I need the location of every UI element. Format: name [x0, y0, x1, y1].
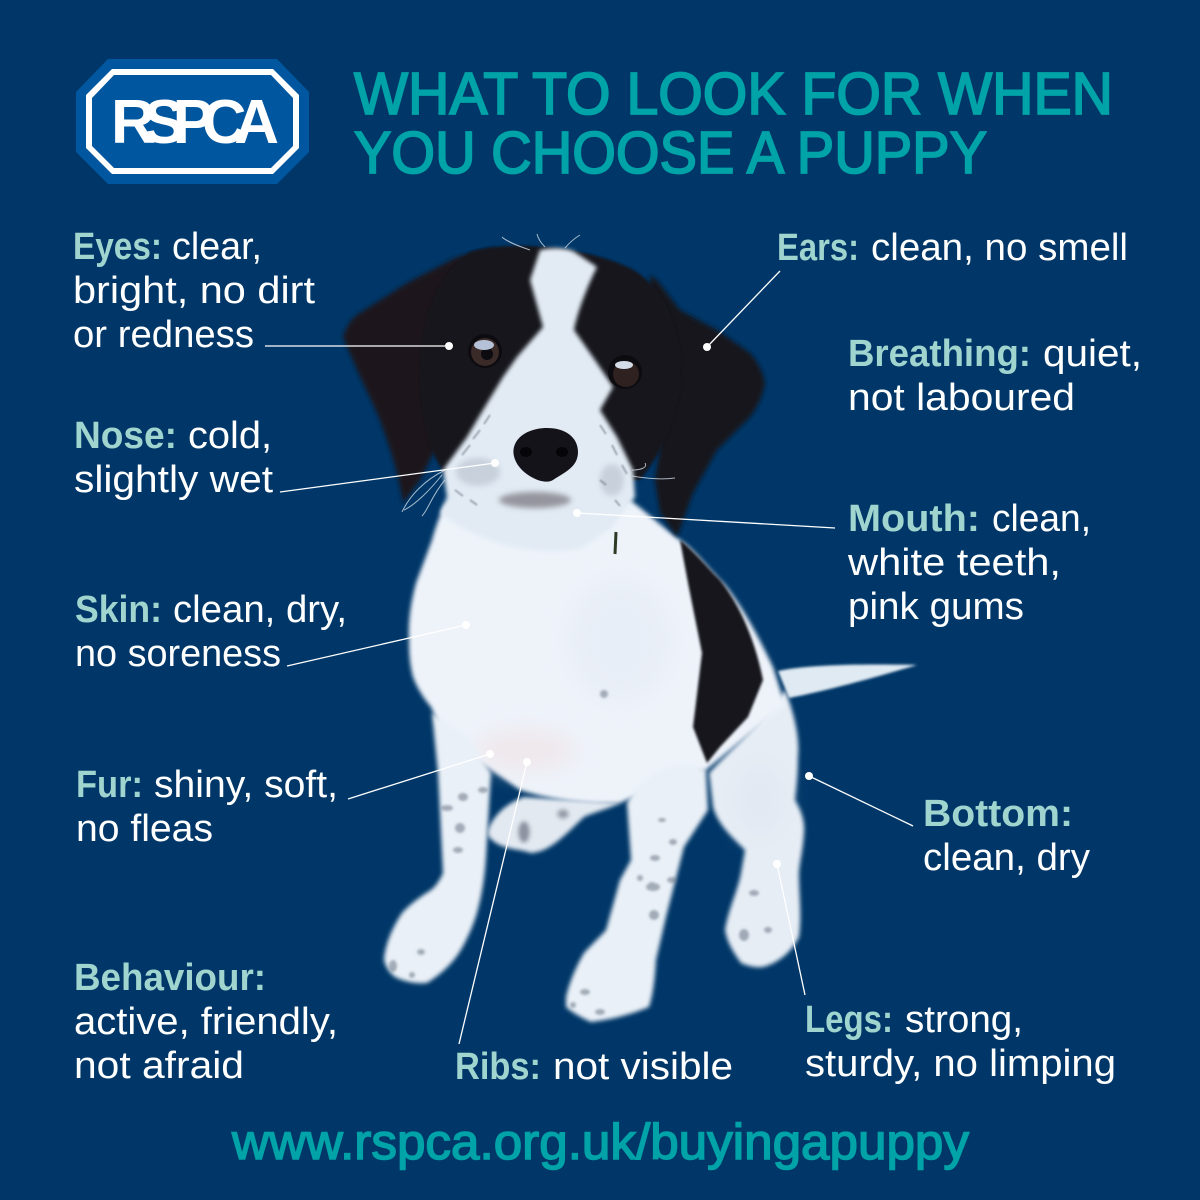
title — [354, 61, 1113, 186]
puppy right front leg — [566, 765, 708, 1022]
callout: ears: Ears: — [777, 227, 859, 269]
puppy right ear — [650, 275, 765, 537]
callout: eyes: or redness — [73, 314, 254, 356]
puppy leg speckles — [389, 690, 772, 1015]
callout: breathing: quiet, — [1043, 333, 1142, 375]
callout: behaviour: not afraid — [74, 1045, 244, 1087]
callout: ears: clean, no smell — [871, 227, 1128, 269]
puppy rear paw — [488, 797, 620, 853]
puppy left front leg — [384, 713, 491, 983]
puppy left ear — [343, 248, 495, 503]
callout: mouth: Mouth: — [848, 498, 980, 540]
title: YOU CHOOSE A PUPPY — [354, 120, 987, 186]
title: WHAT TO LOOK FOR WHEN — [354, 61, 1113, 127]
callout: legs: strong, — [905, 999, 1023, 1041]
logo: RSPCA: RSPCA — [111, 88, 279, 157]
callout: bottom: Bottom: — [923, 793, 1073, 835]
puppy collar grass — [615, 532, 616, 554]
callout: ribs: not visible — [553, 1046, 733, 1088]
callout: behaviour: active, friendly, — [74, 1001, 338, 1043]
callout: legs: sturdy, no limping — [805, 1043, 1116, 1085]
callout: fur: shiny, soft, — [154, 764, 338, 806]
puppy hind leg — [709, 690, 804, 967]
callout: breathing: Breathing: — [848, 333, 1031, 375]
callout: eyes: clear, — [172, 226, 262, 268]
puppy head black — [420, 246, 681, 480]
website url: www.rspca.org.uk/buyingapuppy — [231, 1114, 969, 1170]
callout: ribs — [455, 1046, 733, 1088]
callout: ribs: Ribs: — [455, 1046, 541, 1088]
callout: mouth: clean, — [992, 498, 1091, 540]
callout: behaviour — [74, 957, 338, 1087]
callout: nose — [74, 415, 273, 501]
callout: breathing — [848, 333, 1142, 419]
callout: skin — [75, 589, 347, 675]
callout: eyes: Eyes: — [73, 226, 162, 268]
callout: skin: Skin: — [75, 589, 162, 631]
callout: fur: Fur: — [76, 764, 143, 806]
callout: fur — [76, 764, 338, 850]
callout: eyes: bright, no dirt — [73, 270, 315, 312]
logo: RSPCA — [76, 59, 309, 184]
puppy photo illustration — [343, 234, 917, 1022]
callout: behaviour: Behaviour: — [74, 957, 266, 999]
callout: legs: Legs: — [805, 999, 893, 1041]
callout: mouth: pink gums — [848, 586, 1024, 628]
puppy whiskers and hairs — [402, 234, 675, 516]
puppy body — [409, 500, 785, 803]
puppy face white blaze and muzzle — [440, 248, 635, 551]
puppy tail — [778, 665, 917, 698]
callout: skin: no soreness — [75, 633, 281, 675]
callout: nose: slightly wet — [74, 459, 273, 501]
callout: eyes — [73, 226, 315, 356]
callout: mouth: white teeth, — [847, 542, 1061, 584]
puppy muzzle shading — [456, 458, 624, 508]
callout: nose: cold, — [188, 415, 272, 457]
puppy eye left — [468, 334, 502, 368]
callout: breathing: not laboured — [848, 377, 1075, 419]
puppy chest shading — [475, 580, 784, 836]
callout: mouth — [847, 498, 1091, 628]
puppy nose — [513, 428, 578, 482]
callout: bottom — [923, 793, 1090, 879]
pointer lines and dots — [265, 271, 913, 1044]
callout: fur: no fleas — [76, 808, 213, 850]
callout: legs — [805, 999, 1116, 1085]
puppy black back patch — [680, 540, 763, 763]
callout: nose: Nose: — [74, 415, 177, 457]
callout: bottom: clean, dry — [923, 837, 1090, 879]
puppy eye right — [608, 355, 642, 389]
puppy fur texture — [455, 415, 627, 506]
callout: skin: clean, dry, — [173, 589, 347, 631]
